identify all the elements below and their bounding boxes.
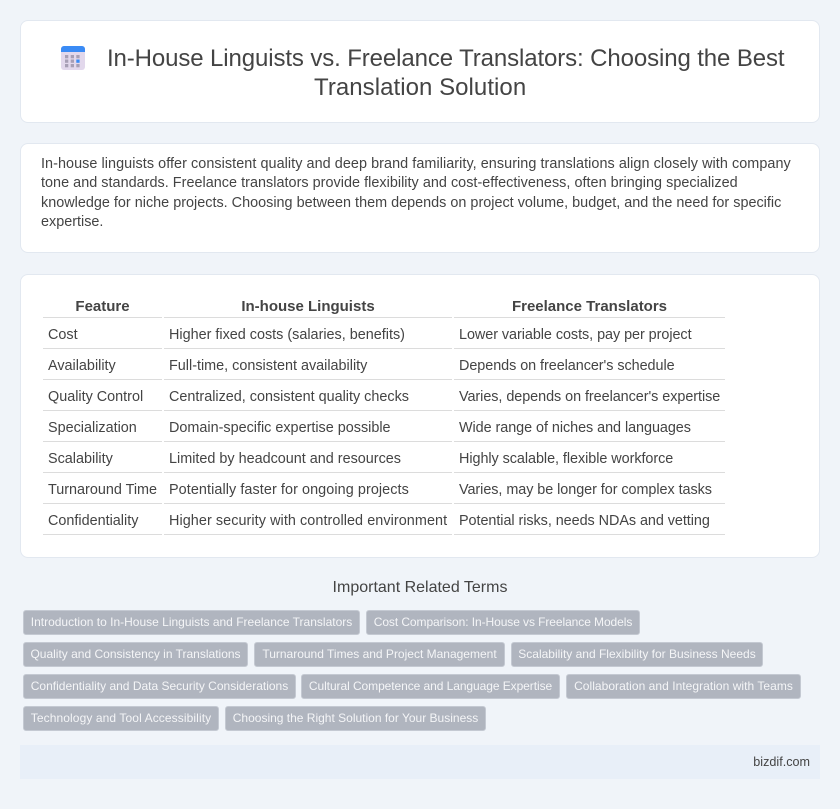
related terms tags: Quality and Consistency in Translations [30,647,241,661]
heading: related terms: Important Related Terms [333,579,507,596]
comparison table: Turnaround Time [48,482,157,498]
comparison table: Highly scalable, flexible workforce [459,451,673,467]
comparison table: Lower variable costs, pay per project [459,327,692,343]
panel: summary [20,143,820,253]
comparison table: Higher fixed costs (salaries, benefits) [169,327,405,343]
footer bar [20,745,820,779]
related terms tags: Confidentiality and Data Security Considerations [31,679,288,693]
related terms tags: Introduction to In-House Linguists and Freelance Translators [31,615,352,629]
panel: comparison table [20,274,820,558]
comparison table: Wide range of niches and languages [459,420,691,436]
related terms tags: Collaboration and Integration with Teams [574,679,793,693]
title: Translation Solution [314,74,526,101]
comparison table: Confidentiality [48,513,138,529]
comparison table: Centralized, consistent quality checks [169,389,409,405]
text block: summary: In-house linguists offer consistent quality and deep brand familiarity, ensuring translations align closely with company [41,156,791,172]
text block: summary: knowledge for niche projects. Choosing between them depends on project volume, budget, and the need for specific [41,194,781,210]
related terms tags: Scalability and Flexibility for Business Needs [518,647,756,661]
comparison table: Potentially faster for ongoing projects [169,482,409,498]
comparison table: Cost [48,327,78,343]
comparison table: Full-time, consistent availability [169,358,367,374]
comparison table: In-house Linguists [241,298,375,315]
related terms tags: Cultural Competence and Language Expertise [309,679,552,693]
related terms tags: Cost Comparison: In-House vs Freelance Models [374,615,632,629]
comparison table: Varies, depends on freelancer's expertise [459,389,720,405]
related terms tags: Choosing the Right Solution for Your Business [233,711,478,725]
icon: calendar [61,46,85,70]
text block: summary [41,156,791,230]
comparison table [43,298,725,535]
comparison table: Higher security with controlled environment [169,513,447,529]
comparison table: Availability [48,358,116,374]
comparison table: Varies, may be longer for complex tasks [459,482,712,498]
comparison table: Domain-specific expertise possible [169,420,391,436]
related terms tags: Turnaround Times and Project Management [262,647,497,661]
comparison table: Specialization [48,420,137,436]
comparison table: Limited by headcount and resources [169,451,401,467]
comparison table: Depends on freelancer's schedule [459,358,675,374]
footer source text: bizdif.com [753,755,810,769]
comparison table: Feature [75,298,130,315]
comparison table: Scalability [48,451,113,467]
text block: summary: tone and standards. Freelance translators provide flexibility and cost-effectiveness, often bringing specialized [41,175,738,191]
panel: title header [20,20,820,123]
text block: summary: expertise. [41,214,103,230]
comparison table: Quality Control [48,389,143,405]
title [107,45,784,101]
title: In-House Linguists vs. Freelance Translators: Choosing the Best [107,45,784,72]
comparison table: Potential risks, needs NDAs and vetting [459,513,710,529]
related terms tags: Technology and Tool Accessibility [31,711,211,725]
related terms tags [23,610,801,731]
comparison table: Freelance Translators [512,298,667,315]
